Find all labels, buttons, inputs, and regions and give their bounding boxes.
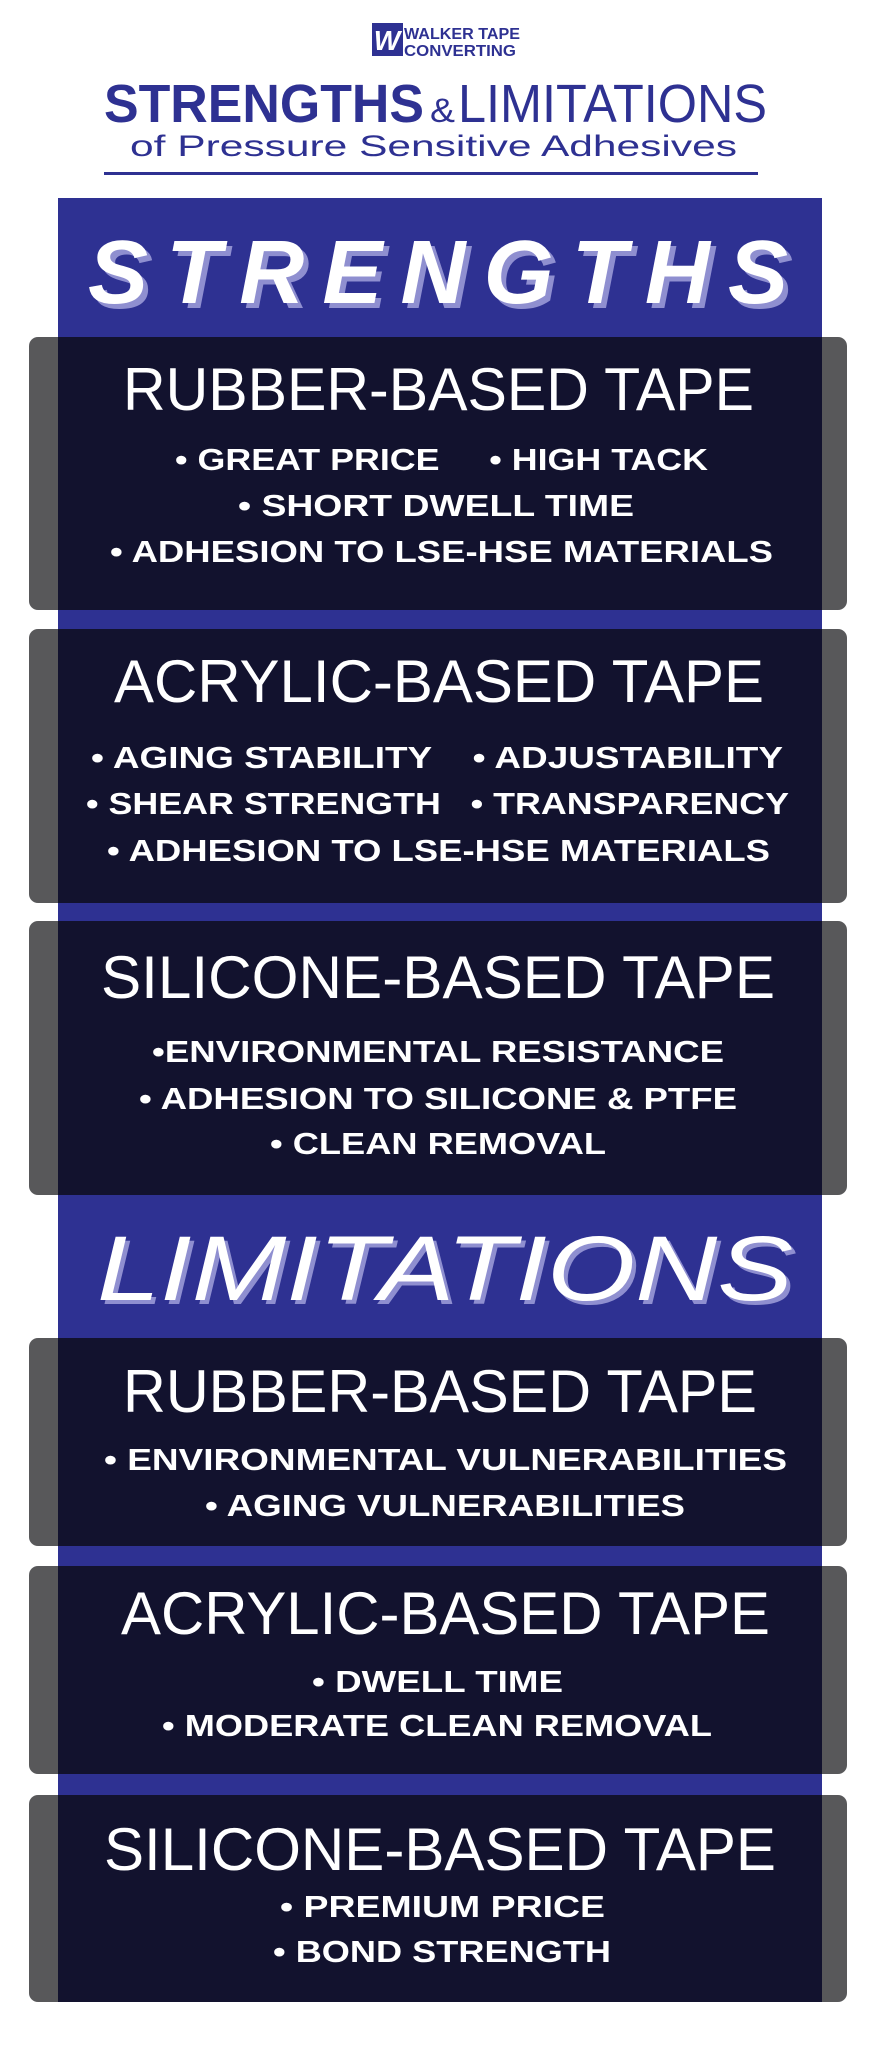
panel: strengths rubber: • GREAT PRICE • HIGH TACK — [175, 442, 709, 477]
panel: strengths acrylic: • AGING STABILITY • ADJUSTABILITY — [91, 740, 783, 775]
logo — [372, 23, 520, 60]
panel: limitations acrylic: • MODERATE CLEAN REMOVAL — [162, 1708, 712, 1743]
panel: limitations rubber: • AGING VULNERABILITIES — [205, 1488, 685, 1523]
panel: strengths silicone: • CLEAN REMOVAL — [270, 1126, 606, 1161]
logo: WALKER TAPE — [404, 26, 520, 43]
panel: strengths rubber: • ADHESION TO LSE-HSE MATERIALS — [110, 534, 773, 569]
panel: limitations acrylic: • DWELL TIME — [312, 1664, 563, 1699]
logo: CONVERTING — [404, 43, 516, 60]
panel: limitations silicone: • PREMIUM PRICE — [280, 1889, 605, 1924]
panel: strengths silicone — [29, 921, 847, 1195]
panel: strengths rubber — [29, 337, 847, 610]
panel: strengths rubber: RUBBER-BASED TAPE — [123, 356, 754, 423]
panel: strengths silicone: SILICONE-BASED TAPE — [101, 944, 775, 1011]
title: & — [430, 92, 455, 130]
panel: strengths silicone: •ENVIRONMENTAL RESISTANCE — [152, 1034, 724, 1069]
panel: strengths silicone: • ADHESION TO SILICONE & PTFE — [139, 1081, 737, 1116]
panel: strengths acrylic: ACRYLIC-BASED TAPE — [114, 648, 764, 715]
heading: STRENGTHS: STRENGTHS — [88, 223, 788, 323]
panel: limitations acrylic: ACRYLIC-BASED TAPE — [121, 1580, 770, 1647]
panel: strengths acrylic: • ADHESION TO LSE-HSE MATERIALS — [107, 833, 770, 868]
blue band — [58, 198, 822, 2000]
panel: limitations rubber: RUBBER-BASED TAPE — [123, 1358, 757, 1425]
logo: W — [374, 25, 403, 56]
panel: limitations silicone: SILICONE-BASED TAPE — [104, 1816, 776, 1883]
panel: limitations acrylic — [29, 1566, 847, 1774]
panel: limitations rubber: • ENVIRONMENTAL VULNERABILITIES — [104, 1442, 787, 1477]
panel: limitations silicone: • BOND STRENGTH — [273, 1934, 611, 1969]
panel: strengths acrylic: • SHEAR STRENGTH • TRANSPARENCY — [86, 786, 789, 821]
heading: LIMITATIONS: LIMITATIONS — [101, 1222, 797, 1324]
subtitle: of Pressure Sensitive Adhesives — [130, 130, 737, 163]
title: LIMITATIONS — [458, 74, 767, 134]
heading: STRENGTHS: STRENGTHS — [93, 228, 793, 328]
panel: strengths acrylic — [29, 629, 847, 903]
title — [104, 74, 767, 134]
panel: limitations silicone — [29, 1795, 847, 2002]
heading: LIMITATIONS: LIMITATIONS — [97, 1218, 793, 1320]
panel: limitations rubber — [29, 1338, 847, 1546]
title: STRENGTHS — [104, 74, 424, 134]
panel: strengths rubber: • SHORT DWELL TIME — [238, 488, 634, 523]
